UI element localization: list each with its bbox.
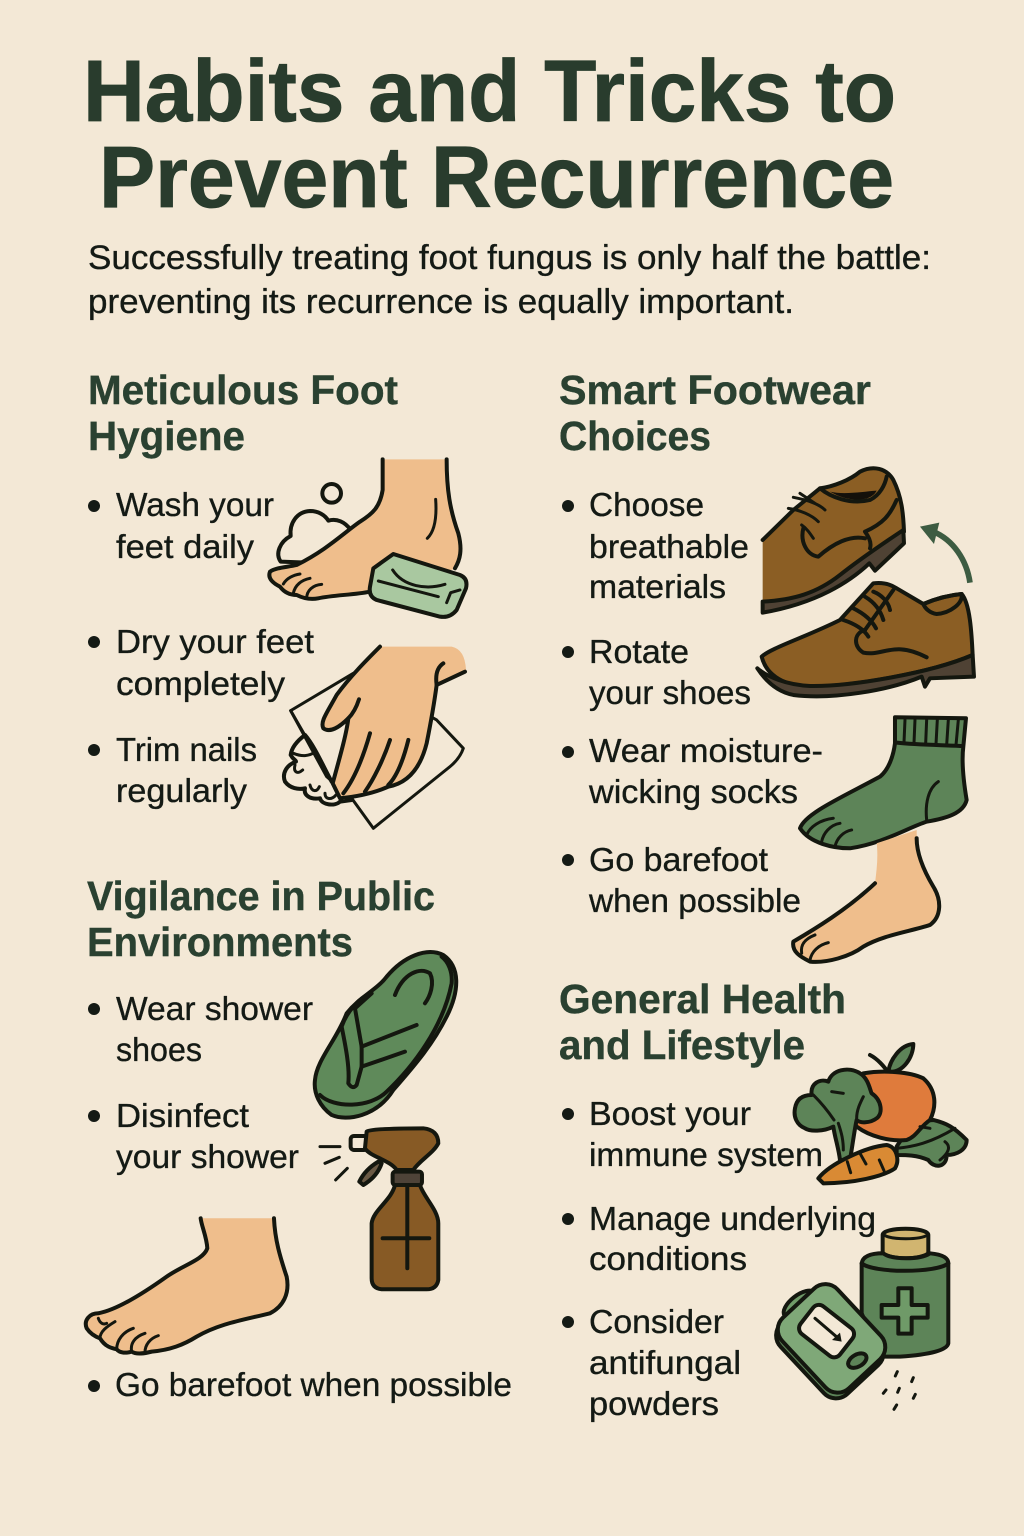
- panel: general health and lifestyle: [559, 976, 967, 1422]
- bullet: wash feet: feet daily: [116, 528, 255, 565]
- title: Habits and Tricks to: [83, 43, 896, 140]
- bullet: boost immune system: Boost your: [589, 1095, 751, 1132]
- bullet: manage underlying conditions: conditions: [589, 1240, 747, 1277]
- heading: general health and lifestyle: [559, 976, 846, 1068]
- bullet: breathable materials: [562, 486, 749, 605]
- bullet: wash feet: Wash your: [116, 486, 274, 523]
- heading: vigilance in public environments: Environments: [87, 919, 353, 965]
- bullet: antifungal powders: powders: [589, 1385, 719, 1422]
- bullet: trim nails: regularly: [116, 772, 248, 809]
- icon: spray bottle: [320, 1128, 438, 1289]
- bullet: disinfect shower: Disinfect: [116, 1097, 249, 1134]
- bullet: manage underlying conditions: [562, 1200, 876, 1277]
- bullet: dry feet: [88, 623, 314, 702]
- bullet: shower shoes: [88, 990, 313, 1068]
- icon: foot with soap and bubbles: [269, 459, 466, 617]
- bullet: breathable materials: materials: [589, 568, 726, 605]
- bullet: wash feet: [88, 486, 274, 565]
- heading: vigilance in public environments: [87, 873, 435, 965]
- bullet: rotate shoes: your shoes: [589, 674, 751, 711]
- bullet: rotate shoes: [562, 633, 751, 711]
- bullet: go barefoot: Go barefoot when possible: [115, 1366, 512, 1403]
- bullet: trim nails: Trim nails: [116, 731, 257, 768]
- bullet: shower shoes: Wear shower: [116, 990, 313, 1027]
- bullet: go barefoot: Go barefoot: [589, 841, 768, 878]
- icon: top brown shoe: [763, 468, 904, 613]
- bullet: antifungal powders: [562, 1303, 741, 1422]
- bullet: breathable materials: breathable: [589, 528, 749, 565]
- intro text: [88, 239, 931, 321]
- heading: general health and lifestyle: and Lifestyle: [559, 1022, 805, 1068]
- bullet: moisture-wicking socks: wicking socks: [588, 773, 798, 810]
- bullet: moisture-wicking socks: [562, 732, 823, 810]
- icon: bare foot: [86, 1218, 287, 1354]
- bullet: moisture-wicking socks: Wear moisture-: [589, 732, 823, 769]
- icon: fruit and vegetables: [795, 1044, 967, 1183]
- bullet: manage underlying conditions: Manage underlying: [589, 1200, 876, 1237]
- bullet: shower shoes: shoes: [116, 1031, 202, 1068]
- bullet: go barefoot: [562, 841, 801, 919]
- bullet: disinfect shower: [88, 1097, 299, 1175]
- icon: green sock: [800, 717, 967, 848]
- bullet: disinfect shower: your shower: [116, 1138, 299, 1175]
- bullet: trim nails: [88, 731, 257, 809]
- heading: general health and lifestyle: General Health: [559, 976, 846, 1022]
- panel: vigilance in public environments: [86, 873, 512, 1403]
- icon: bare foot under sock: [793, 830, 939, 962]
- bullet: go barefoot: when possible: [588, 882, 801, 919]
- icon: bottom brown shoe: [757, 583, 974, 696]
- icon: curved rotate arrow: [920, 523, 970, 583]
- bullet: rotate shoes: Rotate: [589, 633, 689, 670]
- icon: flip flop: [315, 952, 456, 1118]
- panel: meticulous foot hygiene: [88, 367, 466, 828]
- icon: glucose meter: [769, 1277, 892, 1405]
- bullet: breathable materials: Choose: [589, 486, 704, 523]
- title: Prevent Recurrence: [99, 129, 894, 226]
- intro text: Successfully treating foot fungus is only half the battle:: [88, 239, 931, 277]
- heading: meticulous foot hygiene: Meticulous Foot: [88, 367, 398, 413]
- heading: smart footwear choices: Smart Footwear: [559, 367, 871, 413]
- heading: smart footwear choices: Choices: [559, 413, 711, 459]
- heading: vigilance in public environments: Vigilance in Public: [87, 873, 435, 919]
- title: [83, 43, 896, 226]
- panel: smart footwear choices: [559, 367, 974, 962]
- bullet: boost immune system: immune system: [589, 1136, 823, 1173]
- bullet: dry feet: Dry your feet: [116, 623, 314, 660]
- bullet: boost immune system: [562, 1095, 823, 1173]
- bullet: dry feet: completely: [116, 665, 286, 702]
- heading: meticulous foot hygiene: Hygiene: [88, 413, 245, 459]
- icon: powder dots: [883, 1372, 915, 1409]
- intro text: preventing its recurrence is equally important.: [88, 283, 794, 321]
- heading: meticulous foot hygiene: [88, 367, 398, 459]
- bullet: antifungal powders: antifungal: [589, 1344, 741, 1381]
- icon: medicine bottle: [862, 1229, 948, 1357]
- icon: hand drying foot with towel: [284, 647, 466, 828]
- heading: smart footwear choices: [559, 367, 871, 459]
- bullet: antifungal powders: Consider: [589, 1303, 724, 1340]
